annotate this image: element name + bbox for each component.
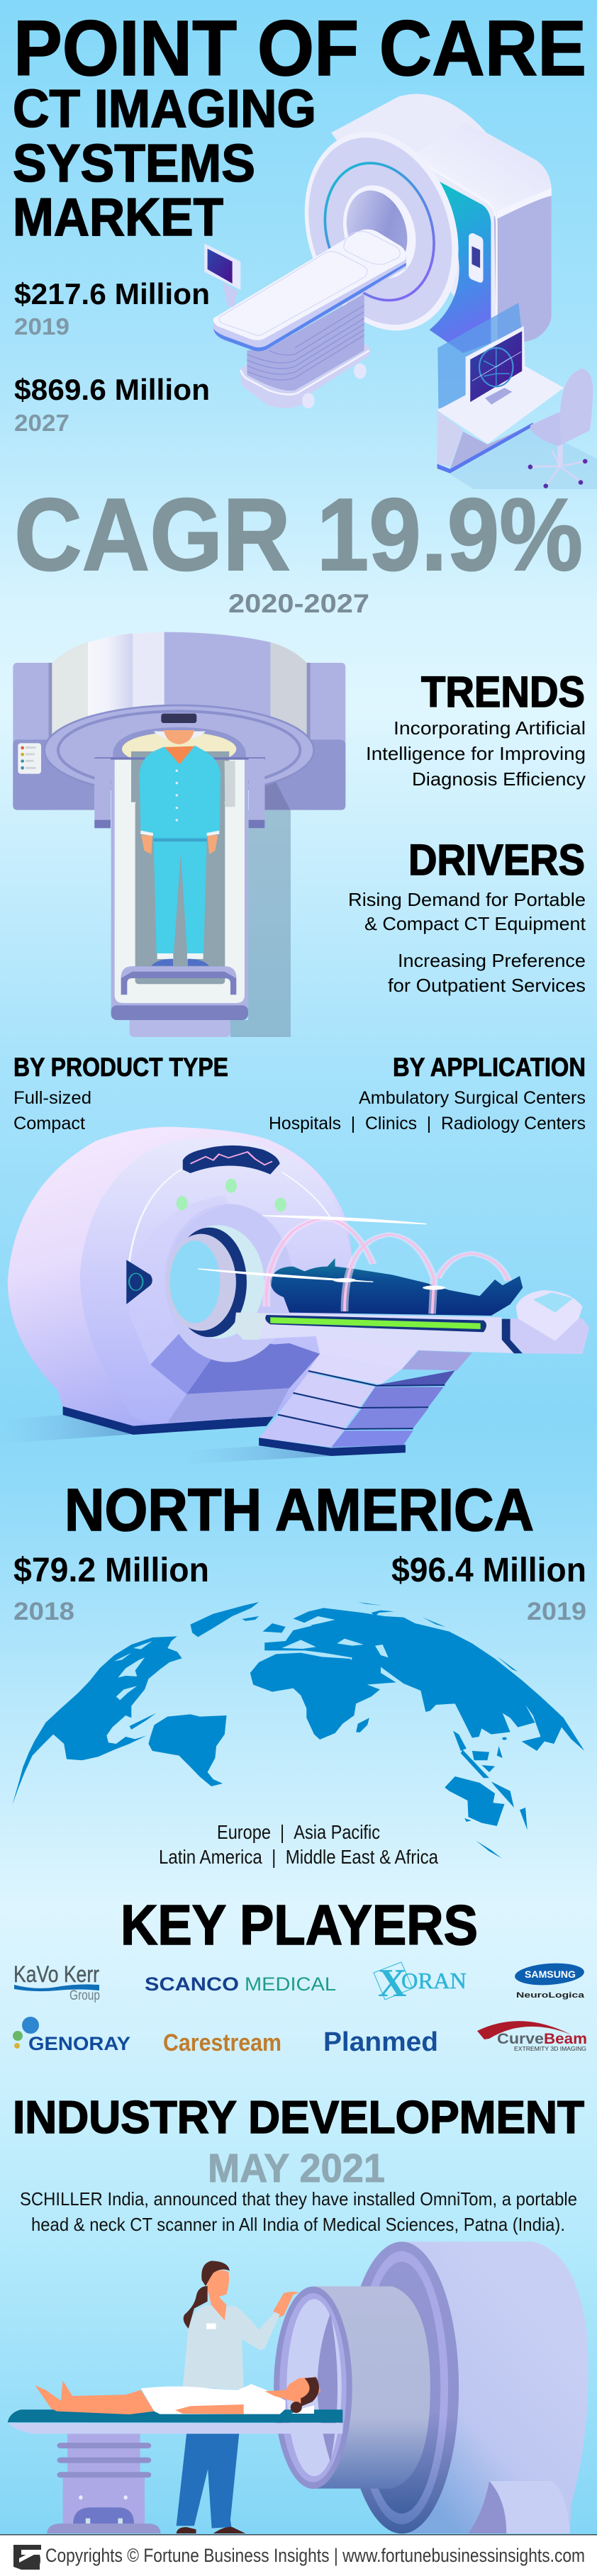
logo: CurveBeam: Curve [497, 2031, 544, 2047]
trends: Incorporating Artificial [394, 717, 586, 739]
title: MARKET [13, 187, 223, 247]
small control screen [204, 244, 240, 307]
industry development heading: INDUSTRY DEVELOPMENT [13, 2091, 584, 2143]
logo: Scanco Medical: SCANCO [145, 1973, 239, 1995]
market value 2027 [14, 373, 210, 436]
title [13, 5, 586, 247]
logo: KaVo Kerr [13, 1961, 100, 2003]
north america value 2018 [13, 1552, 209, 1625]
floor shadows [0, 1415, 331, 1464]
title: CT IMAGING [13, 79, 316, 138]
logo: Scanco Medical [145, 1973, 336, 1995]
other regions: Europe | Asia Pacific [217, 1821, 380, 1843]
logo: Xoran: X [378, 1961, 406, 2005]
development description [20, 2188, 577, 2235]
logo: Planmed: Planmed [323, 2027, 438, 2057]
illustration: large CT scanner with patient [0, 1127, 589, 1464]
desk with monitor [437, 303, 564, 474]
scan beams [198, 1216, 508, 1314]
by product type: Compact [13, 1114, 85, 1133]
logo: KaVo Kerr: Group [69, 1988, 100, 2003]
trends: Diagnosis Efficiency [412, 768, 586, 790]
key players heading: KEY PLAYERS [121, 1893, 478, 1956]
market value 2019 [14, 277, 210, 340]
by application: Hospitals | Clinics | Radiology Centers [269, 1114, 586, 1133]
north america value 2019 [391, 1552, 586, 1625]
logo: Samsung NeuroLogica: NeuroLogica [516, 1991, 585, 2000]
by application [269, 1053, 586, 1133]
scanner body [331, 94, 552, 353]
drivers [348, 836, 586, 996]
footer [0, 2534, 597, 2576]
north america value 2019: $96.4 Million [391, 1552, 586, 1589]
status display [177, 1146, 286, 1211]
market value 2019: 2019 [14, 313, 69, 340]
world map [12, 1602, 584, 1859]
drivers: & Compact CT Equipment [364, 913, 586, 934]
north america value 2019: 2019 [527, 1598, 586, 1625]
footer logo [13, 2545, 41, 2570]
logo: Carestream: Carestream [163, 2029, 281, 2056]
drivers: DRIVERS [408, 836, 585, 884]
drivers: Increasing Preference [398, 950, 586, 971]
scanner body [8, 1127, 354, 1435]
trends: TRENDS [421, 668, 585, 716]
illustration: CT scanner front view with patient [13, 632, 345, 1037]
scanner [274, 2241, 588, 2533]
logo: Genoray [13, 2017, 130, 2054]
patient [140, 746, 221, 966]
market value 2019: $217.6 Million [14, 277, 210, 310]
patient table [8, 2409, 342, 2533]
logo: Xoran [374, 1961, 467, 2005]
doctor [177, 2261, 299, 2533]
logo: CurveBeam: EXTREMITY 3D IMAGING [514, 2046, 586, 2052]
trends [366, 668, 586, 790]
logo: Samsung NeuroLogica [514, 1961, 585, 2000]
table bed [94, 751, 265, 1037]
drivers: Rising Demand for Portable [348, 889, 586, 910]
by product type: BY PRODUCT TYPE [13, 1053, 228, 1082]
patient [270, 1258, 523, 1316]
logo: KaVo Kerr: KaVo Kerr [13, 1961, 99, 1987]
date: MAY 2021 [208, 2146, 385, 2191]
gantry [13, 632, 345, 810]
logo: CurveBeam [477, 2021, 587, 2052]
floor shadow under desk [450, 427, 597, 489]
CAGR: 2020-2027 [228, 589, 369, 618]
logo: Xoran: ORAN [401, 1968, 467, 1993]
illustration: isometric CT scanner with desk [204, 94, 597, 489]
table top [234, 1290, 589, 1354]
logo: Samsung NeuroLogica: SAMSUNG [525, 1969, 576, 1980]
office chair [528, 369, 593, 488]
scanner front disc [280, 112, 484, 351]
north america value 2018: 2018 [13, 1598, 74, 1625]
title: SYSTEMS [13, 133, 255, 193]
logo: Genoray: GENORAY [28, 2033, 130, 2054]
other regions [159, 1821, 438, 1868]
development description: head & neck CT scanner in All India of Medical Sciences, Patna (India). [31, 2214, 565, 2235]
other regions: Latin America | Middle East & Africa [159, 1846, 438, 1868]
by application: Ambulatory Surgical Centers [359, 1088, 586, 1108]
patient [35, 2377, 320, 2414]
logo: CurveBeam: Beam [544, 2031, 587, 2047]
market value 2027: $869.6 Million [14, 373, 210, 406]
by product type [13, 1053, 228, 1133]
shadow [248, 810, 291, 1037]
drivers: for Outpatient Services [388, 975, 586, 996]
by product type: Full-sized [13, 1088, 91, 1108]
market value 2027: 2027 [14, 410, 69, 436]
north america heading: NORTH AMERICA [65, 1477, 534, 1543]
illustration: doctor with patient and scanner [8, 2241, 588, 2533]
patient table [213, 230, 406, 408]
table base [259, 1336, 472, 1456]
north america value 2018: $79.2 Million [13, 1552, 209, 1589]
trends: Intelligence for Improving [366, 743, 586, 764]
logo: Scanco Medical: MEDICAL [245, 1973, 336, 1995]
